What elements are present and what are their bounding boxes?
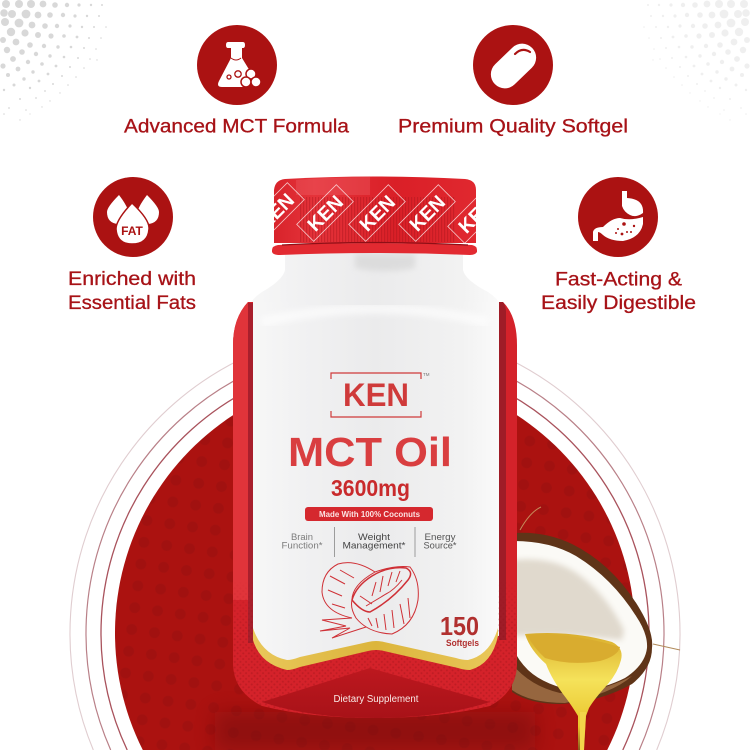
dietary supplement label: Dietary Supplement — [334, 694, 419, 705]
benefits row — [282, 527, 457, 557]
heading: advanced formula: Advanced MCT Formula — [124, 116, 349, 138]
cap KEN marks — [274, 182, 476, 243]
heading: softgel: Premium Quality Softgel — [398, 116, 628, 138]
neck and shoulders — [250, 252, 500, 640]
red wrap — [233, 302, 517, 718]
heading: essential fats: Essential Fats — [68, 292, 196, 314]
benefits row: Weight — [358, 532, 390, 543]
benefits row: Brain — [291, 532, 313, 543]
KEN logo: KEN — [343, 377, 409, 413]
benefits row: Energy — [424, 532, 456, 543]
oil pool and drip — [525, 633, 622, 750]
red background circle — [115, 373, 635, 750]
coconut line drawing — [320, 563, 418, 638]
heading: essential fats — [68, 268, 196, 314]
bottle cap — [272, 176, 477, 255]
icon: fat drops: FAT — [121, 224, 144, 238]
bottle shadow — [215, 712, 535, 750]
cap KEN marks: KEN — [303, 191, 348, 236]
cap KEN marks: KEN — [454, 193, 499, 238]
product name: MCT Oil — [288, 429, 452, 475]
icon: fat drops — [93, 177, 173, 257]
white label — [253, 302, 498, 660]
dark wedge — [262, 668, 490, 718]
coconut claim pill: Made With 100% Coconuts — [319, 510, 421, 519]
softgel count: 150 — [440, 611, 479, 641]
benefits row: Function* — [282, 540, 323, 552]
cap KEN marks: KEN — [405, 191, 450, 236]
icon: stomach — [578, 177, 658, 257]
bottle — [233, 252, 517, 718]
cap KEN marks: KEN — [355, 191, 400, 236]
decorative halftone dots, top right — [643, 0, 750, 121]
heading: digestible — [541, 268, 696, 314]
gold band — [253, 628, 498, 670]
KEN logo: TM — [423, 372, 430, 377]
heading: essential fats: Enriched with — [68, 268, 196, 290]
softgel count: Softgels — [446, 638, 479, 649]
coconut claim pill — [305, 507, 433, 521]
cap KEN marks: KEN — [254, 189, 299, 234]
benefits row: Source* — [424, 540, 457, 552]
KEN logo — [331, 372, 430, 417]
decorative halftone dots, top left — [0, 0, 107, 121]
icon: flask — [197, 25, 277, 105]
concentric rings — [70, 328, 680, 750]
icon: softgel — [473, 25, 553, 105]
heading: digestible: Fast-Acting & — [555, 268, 682, 290]
benefits row: Management* — [342, 540, 406, 552]
heading: digestible: Easily Digestible — [541, 292, 696, 314]
dosage: 3600mg — [331, 475, 410, 501]
coconut half with oil — [512, 507, 680, 750]
